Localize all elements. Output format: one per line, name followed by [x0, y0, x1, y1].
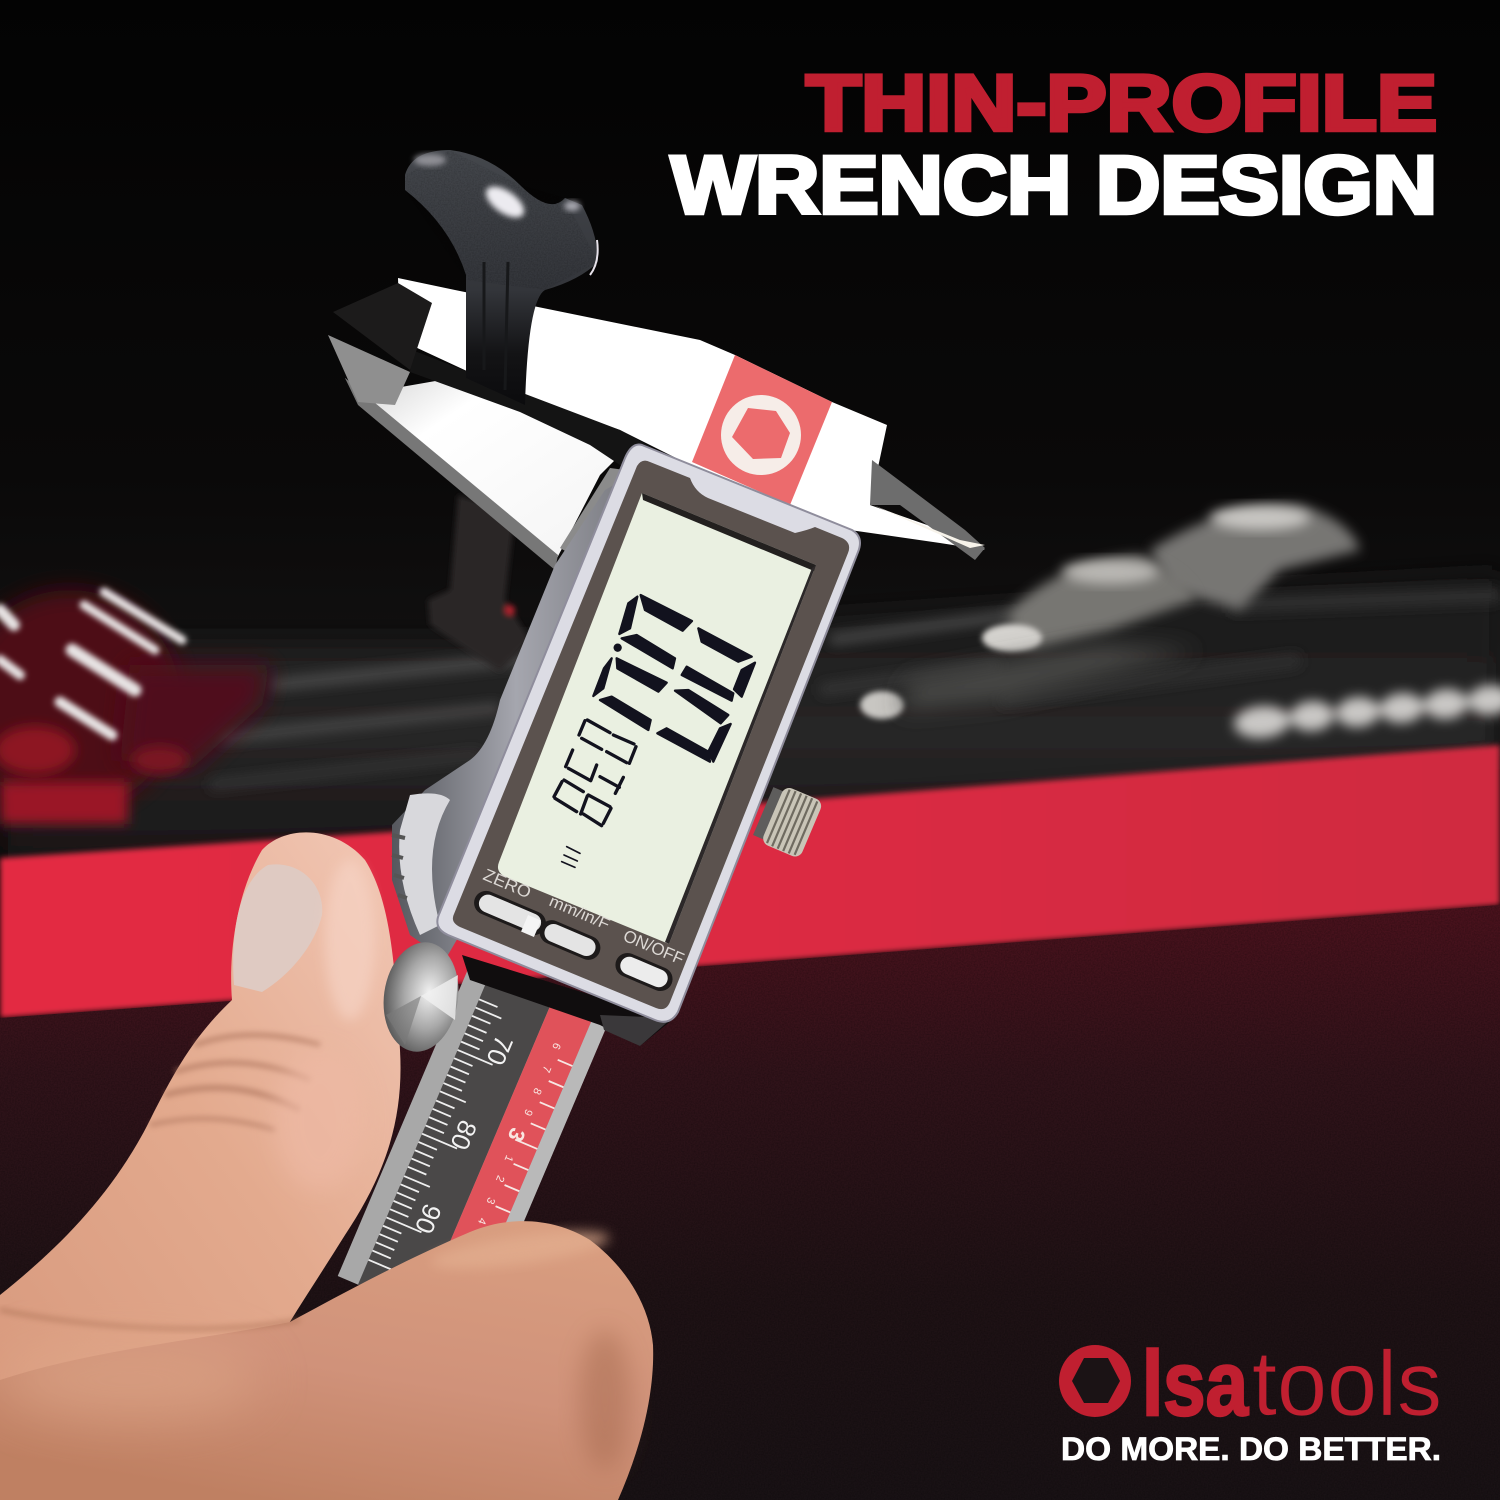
icon: hexagon bolt logo	[721, 395, 801, 475]
label ZERO: ZERO	[480, 865, 534, 902]
title line 2: WRENCH DESIGN: WRENCH DESIGN	[671, 140, 1437, 231]
outer silver bezel	[437, 445, 860, 1022]
caliper jaws	[328, 278, 985, 570]
metric scale numbers: 80	[444, 1116, 483, 1154]
inch scale numbers: 2	[493, 1173, 506, 1184]
blurred red wrench set at left	[0, 590, 270, 824]
inch scale numbers: 7	[539, 1064, 553, 1074]
blurred silver wrench heads at right	[860, 505, 1360, 719]
thumb roller wheel	[377, 937, 465, 1057]
red inch scale	[421, 994, 596, 1328]
dark maroon work surface	[0, 900, 1500, 1500]
pointed outside jaw tip	[870, 460, 985, 560]
label mm/in/F: mm/in/F	[546, 893, 612, 934]
thin-profile wrench held in jaws	[405, 150, 600, 405]
metric scale numbers: 70	[480, 1031, 519, 1070]
LCD screen	[498, 493, 816, 944]
caliper left body casting	[392, 470, 672, 1046]
inch scale numbers: 3	[484, 1196, 497, 1206]
icon: hexagon O mark	[1059, 1345, 1131, 1417]
thumbnail	[233, 864, 322, 992]
knurled locking screw	[752, 782, 824, 859]
blurred reflected wrench behind caliper	[428, 495, 530, 672]
dark metric scale	[358, 967, 555, 1311]
inch scale numbers: 4	[475, 1216, 488, 1226]
blurred logo print on tray	[1233, 683, 1500, 740]
title line 1: THIN-PROFILE: THIN-PROFILE	[806, 58, 1437, 147]
button ON/OFF	[612, 949, 676, 995]
brown display panel	[453, 461, 849, 1009]
shadow block under display	[462, 955, 672, 1046]
blurred red foam band	[0, 745, 1500, 1018]
label ON/OFF: ON/OFF	[620, 926, 687, 969]
brand logo	[1059, 1333, 1442, 1467]
blurred foam tray surface	[0, 572, 1500, 870]
lower silver jaw	[345, 375, 620, 562]
metric scale numbers: 90	[409, 1200, 448, 1238]
inch scale numbers: 1	[502, 1153, 515, 1163]
jaw seam shadow	[410, 350, 690, 468]
button ZERO	[470, 887, 550, 939]
upper white jaw	[398, 278, 985, 550]
human thumb	[0, 832, 401, 1400]
dark angled block on jaw tip	[333, 283, 432, 370]
tagline: DO MORE. DO BETTER.	[1061, 1431, 1441, 1467]
wordmark light part: tools	[1252, 1333, 1442, 1435]
title	[671, 58, 1437, 231]
inch scale numbers: 9	[521, 1107, 535, 1117]
wordmark bold part: lsa	[1142, 1333, 1249, 1435]
metric scale numbers	[409, 1031, 519, 1238]
caliper sliding scale bar	[338, 958, 611, 1335]
scale silver frame	[338, 958, 611, 1335]
inch tick marks	[479, 1057, 572, 1234]
white slider tab between buttons	[521, 915, 541, 937]
button mm/in/F	[536, 916, 604, 964]
inch scale numbers: 3	[503, 1124, 531, 1145]
inch scale numbers: 6	[549, 1041, 563, 1051]
LCD digit segments	[554, 595, 755, 867]
silver angled jaw tip	[328, 335, 410, 405]
metric tick marks	[369, 999, 514, 1275]
lower finger in foreground	[0, 1221, 653, 1500]
inch scale numbers	[468, 1038, 567, 1228]
inch scale numbers: 8	[530, 1086, 544, 1096]
caliper display module	[437, 445, 860, 1022]
red scale band on jaw	[692, 355, 832, 505]
dark studio background	[0, 0, 1500, 680]
